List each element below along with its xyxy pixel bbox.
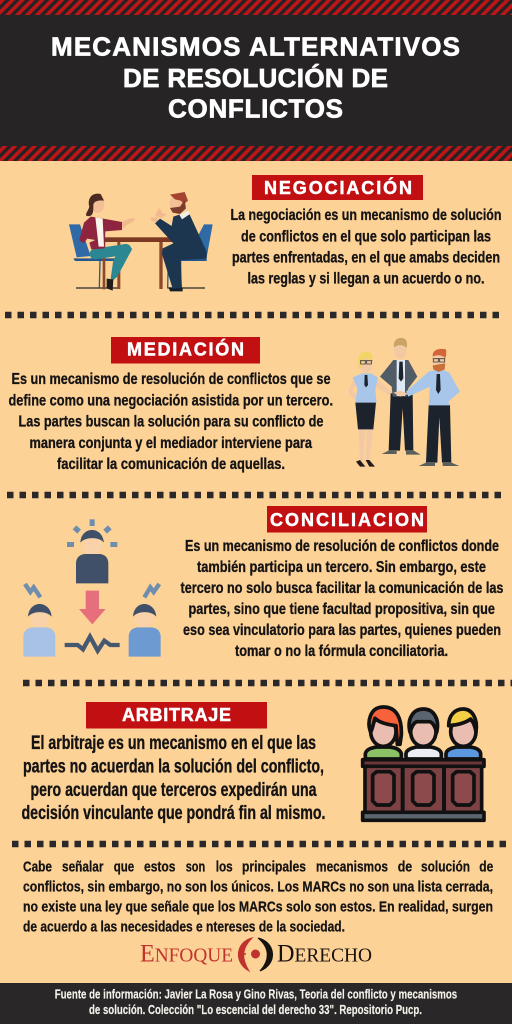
closing paragraph	[23, 859, 493, 936]
text: arbitraje description: partes no acuerdan la solución del conflicto,	[23, 756, 324, 778]
title	[51, 32, 460, 124]
icon: mediator between two parties	[23, 519, 161, 657]
text: mediación description	[8, 371, 333, 473]
text: negociación description	[230, 207, 502, 288]
heading: mediación	[111, 337, 260, 364]
heading: negociación	[252, 175, 423, 200]
logo: Enfoque Derecho	[140, 938, 372, 971]
panel: conciliación	[23, 506, 504, 660]
panel: mediación	[8, 337, 460, 473]
bench	[363, 760, 484, 820]
closing paragraph: son	[186, 859, 205, 876]
rays	[67, 519, 117, 547]
icon: jury of three people at a bench	[363, 707, 484, 820]
juror: left	[365, 707, 401, 759]
title: DE RESOLUCIÓN DE	[123, 63, 388, 93]
title: CONFLICTOS	[168, 94, 343, 124]
text: conciliación description	[180, 538, 504, 660]
text: arbitraje description: pero acuerdan que terceros expedirán una	[30, 780, 317, 801]
text: mediación description: manera conjunta y el mediador interviene para	[30, 435, 312, 452]
title: MECANISMOS ALTERNATIVOS	[51, 32, 460, 62]
closing paragraph: señalar	[62, 859, 104, 876]
closing paragraph: de	[398, 859, 412, 876]
logo: Enfoque Derecho: DERECHO	[277, 940, 372, 968]
closing paragraph: Cabe	[23, 859, 52, 876]
logo: Enfoque Derecho: ENFOQUE	[140, 940, 233, 968]
text: arbitraje description	[22, 733, 326, 824]
text: mediación description: facilitar la comunicación de aquellas.	[57, 456, 285, 473]
header banner	[0, 0, 512, 161]
closing paragraph: que	[114, 859, 134, 876]
closing paragraph: estos	[144, 859, 176, 876]
icon: two people negotiating at a table	[69, 192, 213, 291]
divider	[7, 492, 503, 498]
icon: logo mark	[238, 938, 273, 971]
heading: conciliación: CONCILIACION	[270, 510, 424, 530]
heading: negociación: NEGOCIACIÓN	[264, 177, 412, 198]
text: arbitraje description: El arbitraje es un mecanismo en el que las	[31, 733, 316, 754]
closing paragraph: los	[216, 859, 233, 876]
closing paragraph: solución	[421, 859, 470, 876]
divider	[12, 841, 512, 847]
text: mediación description: Las partes buscan la solución para su conflicto de	[18, 414, 324, 430]
closing paragraph: principales	[242, 859, 306, 876]
divider	[23, 680, 512, 686]
heading: arbitraje: ARBITRAJE	[122, 705, 231, 725]
closing paragraph: mecanismos	[316, 859, 388, 876]
divider	[5, 312, 499, 318]
heading: mediación: MEDIACIÓN	[127, 338, 244, 360]
juror: right	[446, 709, 481, 759]
text: arbitraje description: decisión vinculante que pondrá fin al mismo.	[22, 803, 326, 824]
closing paragraph: de acuerdo a las necesidades e ntereses de la sociedad.	[23, 919, 345, 936]
text: conciliación description: tomar o no la fórmula conciliatoria.	[235, 643, 448, 660]
closing paragraph: de	[479, 859, 493, 876]
juror: middle	[406, 709, 441, 759]
icon: three business people	[348, 338, 460, 467]
panel: negociación	[69, 175, 502, 291]
footer: source	[0, 983, 512, 1024]
text: mediación description: Es un mecanismo de resolución de conflictos que se	[12, 371, 331, 388]
heading: arbitraje	[86, 702, 267, 728]
panel: arbitraje	[22, 702, 484, 824]
text: mediación description: define como una negociación asistida por un tercero.	[8, 392, 333, 409]
